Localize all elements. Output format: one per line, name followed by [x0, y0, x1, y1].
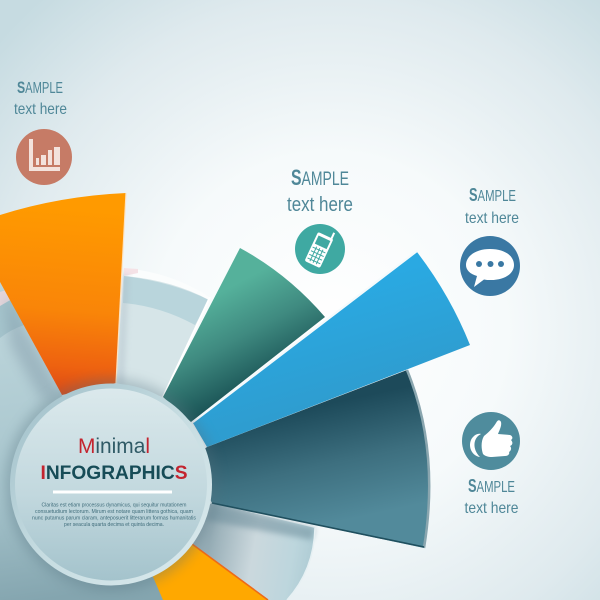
- icon: bar chart: [16, 129, 72, 185]
- text: sample label 2: [287, 165, 353, 216]
- text block: description: Claritas est etiam processus dynamicus, qui sequitur mutationem: [42, 502, 187, 508]
- panel: orange segment bottom: [150, 543, 268, 600]
- text block: description: per seacula quarta decima et quinta decima.: [64, 522, 164, 528]
- text: sample label 1: SAMPLE: [17, 78, 63, 97]
- text: sample label 4: SAMPLE: [468, 476, 515, 496]
- panel: grey sector between orange and green: [116, 268, 210, 397]
- text: sample label 3: text here: [465, 210, 519, 227]
- divider line: [53, 490, 172, 494]
- text block: description: consuetudium lectorum. Mirum est notare quam littera gothica, quam: [35, 509, 194, 515]
- text: sample label 1: text here: [14, 101, 67, 118]
- panel: lower grey sector: [170, 503, 315, 600]
- panel: blue segment: [193, 251, 470, 447]
- text: sample label 3: [465, 185, 519, 227]
- text: sample label 4: text here: [464, 500, 519, 517]
- icon: thumbs up: [462, 412, 520, 470]
- panel: pale sector left of orange: [0, 282, 165, 600]
- text: sample label 3: SAMPLE: [469, 185, 516, 205]
- heading: INFOGRAPHICS: INFOGRAPHICS: [40, 462, 188, 484]
- text: sample label 2: SAMPLE: [291, 165, 349, 190]
- panel: dark teal segment: [190, 370, 429, 548]
- panel: centre circle: [5, 378, 217, 590]
- text block: description: nunc putamus parum claram, anteposuerit litterarum formas humanitatis: [32, 516, 196, 522]
- panel: green segment: [163, 248, 325, 422]
- text: sample label 4: [464, 476, 519, 517]
- text block: description: [32, 502, 196, 528]
- panel: orange segment top: [0, 193, 126, 395]
- icon: speech bubble: [460, 236, 520, 296]
- icon: mobile phone: [295, 224, 345, 274]
- text: sample label 2: text here: [287, 194, 353, 216]
- heading: Minimal: Minimal: [78, 435, 150, 458]
- text: sample label 1: [14, 78, 67, 118]
